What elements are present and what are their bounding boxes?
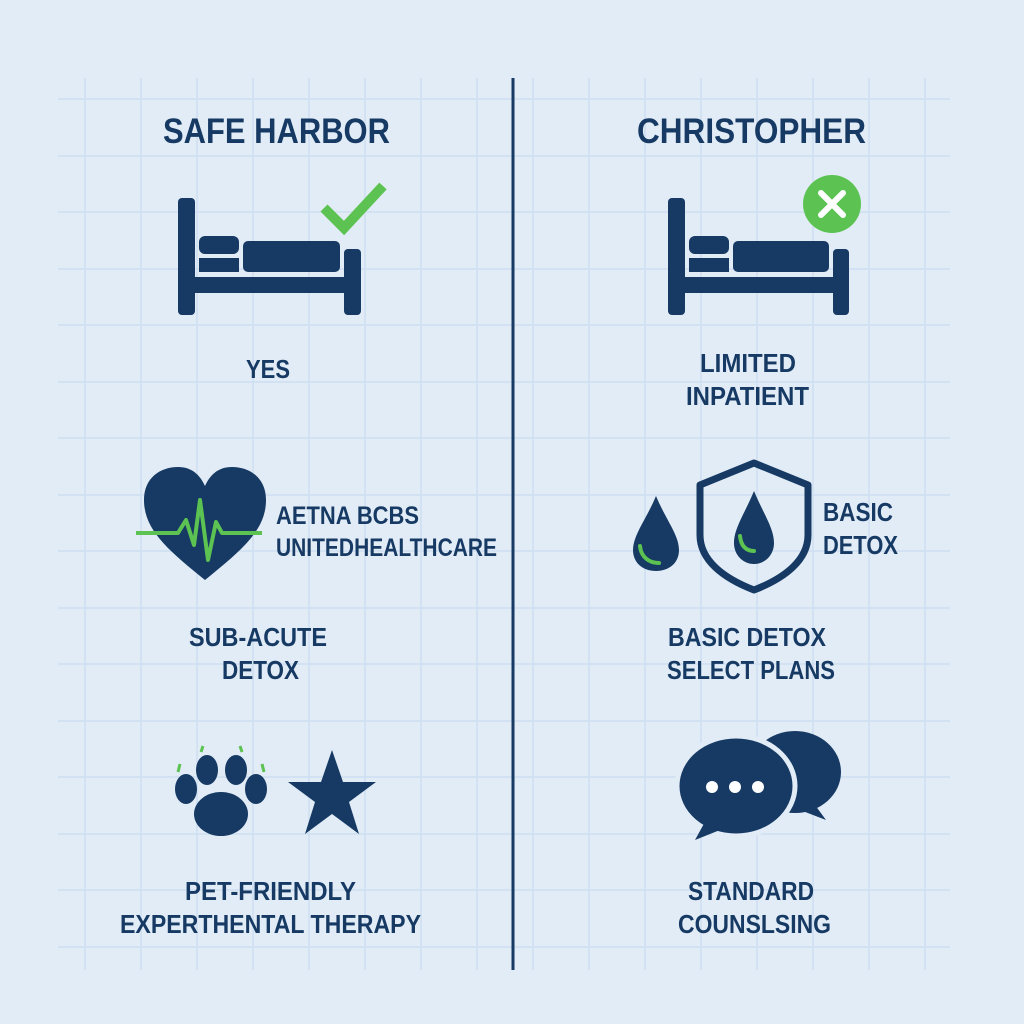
- label: basic detox select plans: [667, 622, 835, 685]
- label: limited inpatient: [686, 348, 809, 411]
- label: pet-friendly: EXPERTHENTAL THERAPY: [120, 909, 421, 939]
- label: insurers: [276, 502, 497, 562]
- icon: drops and shield: [633, 463, 808, 590]
- label: basic detox: DETOX: [823, 530, 899, 560]
- label: sub-acute detox: SUB-ACUTE: [189, 622, 327, 652]
- label: standard counseling: STANDARD: [688, 876, 814, 906]
- icon: paw and star: [175, 746, 376, 836]
- label: yes: YES: [246, 354, 290, 384]
- label: limited inpatient: LIMITED: [700, 348, 796, 378]
- label: basic detox select plans: SELECT PLANS: [667, 655, 835, 685]
- label: basic detox select plans: BASIC DETOX: [668, 622, 827, 652]
- divider: [512, 78, 514, 970]
- title: safe harbor: SAFE HARBOR: [163, 112, 390, 151]
- label: basic detox: [823, 497, 899, 560]
- label: standard counseling: COUNSLSING: [678, 909, 831, 939]
- icon: bed with check: [178, 186, 383, 315]
- label: basic detox: BASIC: [823, 497, 893, 527]
- label: standard counseling: [678, 876, 831, 939]
- label: sub-acute detox: [189, 622, 327, 685]
- label: pet-friendly: PET-FRIENDLY: [185, 876, 356, 906]
- label: insurers: UNITEDHEALTHCARE: [276, 534, 497, 562]
- icon: heart pulse: [136, 467, 266, 580]
- label: sub-acute detox: DETOX: [222, 655, 300, 685]
- title: christopher: CHRISTOPHER: [637, 112, 866, 151]
- icon: speech bubbles: [677, 731, 841, 840]
- label: pet-friendly: [120, 876, 421, 939]
- label: limited inpatient: INPATIENT: [686, 381, 809, 411]
- icon: bed with x: [668, 175, 861, 315]
- label: insurers: AETNA BCBS: [276, 502, 419, 530]
